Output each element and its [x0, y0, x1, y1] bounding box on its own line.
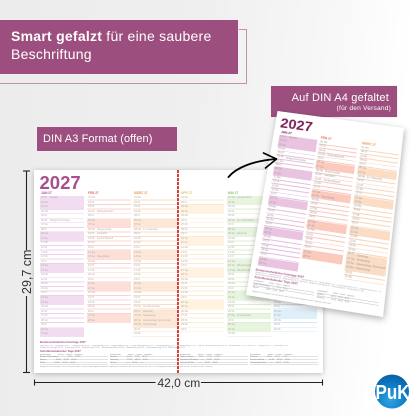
month column: March	[133, 191, 177, 336]
panel: open DIN A3 calendar: 01 Mo 02 Di 03 Mi 04 Do 05 Fr 06 Sa 07 So 08 Mo 09 Di 10 Mi 11 Do 12 Fr 13 Sa 14 So 15 Mo 16 Di 17 Mi 18 Do 19 Fr 20 Sa 21 So 22 Mo 23 Di 24 Mi 25 Do 26 Fr 27 Sa 28 So 29 Mo 30 Di 31 Mi	[134, 196, 141, 335]
panel: folded DIN A4 calendar: Weiberfastnacht	[327, 155, 344, 159]
panel: open DIN A3 calendar: FEB 27	[88, 191, 99, 195]
panel: open DIN A3 calendar: 01 Di 02 Mi 03 Do 04 Fr 05 Sa 06 So 07 Mo 08 Di 09 Mi 10 Do 11 Fr 12 Sa 13 So 14 Mo 15 Di 16 Mi 17 Do 18 Fr 19 Sa 20 So 21 Mo 22 Di 23 Mi 24 Do 25 Fr 26 Sa 27 So 28 Mo 29 Di 30 Mi	[274, 196, 281, 331]
panel: open DIN A3 calendar: 01 Mo 02 Di 03 Mi 04 Do 05 Fr 06 Sa 07 So 08 Mo 09 Di 10 Mi 11 Do 12 Fr 13 Sa 14 So 15 Mo 16 Di 17 Mi 18 Do 19 Fr 20 Sa 21 So 22 Mo 23 Di 24 Mi 25 Do 26 Fr 27 Sa 28 So	[88, 196, 95, 322]
school holidays table A4 right	[316, 290, 379, 309]
title banner	[0, 20, 238, 74]
dimension: width 42.0 cm: 42,0 cm	[158, 376, 200, 390]
panel: open DIN A3 calendar: Karfreitag	[143, 310, 153, 312]
school holidays table 1	[40, 354, 108, 365]
panel: open DIN A3 calendar: Aschermittwoch	[97, 238, 113, 240]
panel: open DIN A3 calendar: Valentinstag	[97, 256, 109, 258]
panel: folded DIN A4 calendar: Fastnacht	[324, 175, 335, 179]
title banner: Beschriftung	[11, 46, 92, 62]
panel: open DIN A3 calendar: Neujahr	[50, 197, 58, 199]
panel: folded DIN A4 calendar: FEB 27	[320, 136, 332, 141]
footnote A3: Angaben zu Feiertagen und Schulferien ohne Gewähr. Alle Angaben wurden sorgfältig recherchiert, die Daten können sich nach Drucklegung ändern, bitte prüfen Sie die Termine vor der Planung.	[40, 366, 212, 368]
panel: open DIN A3 calendar: Chr. Himmelfahrt	[237, 220, 254, 222]
panel: folded DIN A4 calendar: Rosenmontag	[325, 171, 340, 175]
school holidays table A4 left: Bundesland Winter Ostern Pfingsten Baden-Württemberg ----- 22.03. 18.05. Bayern 08.02. 22.03. 18.05.	[253, 280, 290, 293]
panel: open DIN A3 calendar: Weiberfastnacht	[97, 211, 114, 213]
month column: February	[87, 191, 131, 323]
panel: open DIN A3 calendar: 01 Sa 02 So 03 Mo 04 Di 05 Mi 06 Do 07 Fr 08 Sa 09 So 10 Mo 11 Di 12 Mi 13 Do 14 Fr 15 Sa 16 So 17 Mo 18 Di 19 Mi 20 Do 21 Fr 22 Sa 23 So 24 Mo 25 Di 26 Mi 27 Do 28 Fr 29 Sa 30 So 31 Mo	[228, 196, 235, 335]
panel: open DIN A3 calendar: JUN 27	[274, 191, 285, 195]
school holidays table 3	[180, 354, 248, 365]
school holidays table A4 left	[252, 280, 315, 298]
month column: May	[227, 191, 271, 336]
panel: folded DIN A4 calendar: Heilige Drei Könige	[286, 157, 306, 162]
holidays heading A4: Bundeseinheitliche Feiertage 2027	[255, 267, 305, 279]
footnote A4: Angaben zu Feiertagen und Schulferien ohne Gewähr. Alle Angaben wurden sorgfältig recherchiert.	[252, 290, 332, 305]
year heading A3: 2027	[40, 172, 81, 193]
panel: folded DIN A4 calendar: Valentinstag	[321, 196, 334, 200]
panel: folded DIN A4 calendar: 01 Mo 02 Di 03 Mi 04 Do 05 Fr 06 Sa 07 So 08 Mo 09 Di 10 Mi 11 Do 12 Fr 13 Sa 14 So 15 Mo 16 Di 17 Mi 18 Do 19 Fr 20 Sa 21 So 22 Mo 23 Di 24 Mi 25 Do 26 Fr 27 Sa 28 So	[303, 140, 328, 259]
panel: open DIN A3 calendar: Pfingstmontag	[237, 270, 252, 272]
year heading A4: 2027	[279, 116, 313, 135]
school holidays table A4 right: Bundesland Winter Ostern Pfingsten Bremen 01.02. 22.03. 18.05. Hamburg 29.01. 08.03. 10.05.	[317, 290, 354, 303]
label: DIN A4 folded	[271, 86, 397, 117]
label: DIN A3 format	[37, 127, 177, 151]
month column A4: January: Neujahr	[289, 137, 297, 140]
school holidays heading A3: Schulferienkalender Tage 2027	[40, 348, 81, 352]
panel: open DIN A3 calendar: MÄRZ 27	[134, 191, 148, 195]
holidays text A3: Neujahr 01.01. · Karfreitag 26.03. · Ostersonntag 28.03. · Ostermontag 29.03. · Tag der Arbeit 01.05. · Christi Himmelfahrt 06.05. · Pfingstsonntag 16.05. · Pfingstmontag 17.05. · Tag der Deutschen Einheit 03.10. · Weihnachten 25.12. und 26.12. · Neujahr 01.01. · Karfreitag 26.03. Heilige Drei Könige 06.01. · Frauentag 08.03. · Fronleichnam 27.05. · Mariä Himmelfahrt 15.08. · Weltkindertag 20.09. · Reformationstag 31.10. · Allerheiligen 01.11.	[40, 344, 288, 349]
panel: open DIN A3 calendar: Ostersonntag, Sommerzeit	[143, 320, 170, 322]
panel: open DIN A3 calendar: JAN 27	[41, 191, 52, 195]
school holidays table 2	[110, 354, 177, 365]
panel: open DIN A3 calendar: Gründonnerstag	[143, 306, 160, 308]
panel: folded DIN A4 calendar: 01 Fr 02 Sa 03 So 04 Mo 05 Di 06 Mi 07 Do 08 Fr 09 Sa 10 So 11 Mo 12 Di 13 Mi 14 Do 15 Fr 16 Sa 17 So 18 Mo 19 Di 20 Mi 21 Do 22 Fr 23 Sa 24 So 25 Mo 26 Di 27 Mi 28 Do 29 Fr 30 Sa 31 So	[259, 135, 287, 266]
panel: folded DIN A4 calendar: Karfreitag	[357, 255, 368, 258]
panel: open DIN A3 calendar: Rosenmontag	[97, 229, 111, 231]
school holidays heading A4: Schulferienkalender Tage 2027	[254, 275, 298, 286]
label: DIN A3 format: DIN A3 Format (offen)	[43, 133, 152, 145]
panel: open DIN A3 calendar: Pfingstsonntag	[237, 265, 252, 267]
panel: folded DIN A4 calendar: 01 Mo 02 Di 03 Mi 04 Do 05 Fr 06 Sa 07 So 08 Mo 09 Di 10 Mi 11 Do 12 Fr 13 Sa 14 So 15 Mo 16 Di 17 Mi 18 Do 19 Fr 20 Sa 21 So 22 Mo 23 Di 24 Mi 25 Do 26 Fr 27 Sa 28 So 29 Mo 30 Di 31 Mi	[345, 146, 369, 279]
panel: open DIN A3 calendar: Int. Frauentag	[143, 229, 157, 231]
month column: January	[40, 191, 84, 337]
title banner outline	[0, 29, 247, 84]
panel: folded DIN A4 calendar: Ostermontag	[355, 268, 370, 273]
panel: folded DIN A4 calendar: Aschermittwoch	[324, 179, 341, 184]
month column A4: January	[258, 130, 318, 272]
panel: open DIN A3 calendar: Karsamstag	[143, 315, 155, 317]
school holidays table 4	[250, 354, 318, 365]
logo: PuK: PuK	[376, 382, 410, 404]
fold line	[177, 170, 179, 373]
month column A4: March	[343, 141, 399, 286]
panel: open DIN A3 calendar: Fronleichnam	[237, 315, 251, 317]
panel: folded DIN A4 calendar: Karsamstag	[356, 259, 370, 263]
panel: folded DIN A4 calendar: Ostersonntag, Sommerzeit	[356, 264, 385, 270]
month column A4: February	[302, 136, 358, 265]
panel: folded DIN A4 calendar: Int. Frauentag	[367, 177, 382, 181]
panel: open DIN A3 calendar: Fastnacht	[97, 233, 107, 235]
dimension: height 29.7 cm: 29,7 cm	[20, 250, 34, 294]
panel: folded DIN A4 calendar: JAN 27	[281, 130, 292, 135]
logo: PuK	[375, 374, 410, 408]
holidays heading A3: Bundeseinheitliche Feiertage 2027	[40, 340, 86, 344]
panel: open DIN A3 calendar: MAI 27	[228, 191, 238, 195]
label: DIN A4 folded: (für den Versand)	[337, 104, 391, 112]
panel: folded DIN A4 calendar: MÄRZ 27	[362, 141, 376, 147]
panel: open DIN A3 calendar: Heilige Drei Könige	[50, 220, 70, 222]
panel: open DIN A3 calendar	[34, 170, 323, 373]
title banner: Smart gefalzt für eine saubere	[11, 28, 212, 44]
panel: open DIN A3 calendar: APR 27	[181, 191, 192, 195]
label: DIN A4 folded: Auf DIN A4 gefaltet	[292, 92, 389, 104]
month column: April	[180, 191, 224, 332]
panel: open DIN A3 calendar: Ostermontag	[143, 324, 156, 326]
panel: folded DIN A4 calendar	[246, 111, 404, 317]
panel: open DIN A3 calendar: Tag der Arbeit	[237, 197, 251, 199]
panel: open DIN A3 calendar: 01 Do 02 Fr 03 Sa 04 So 05 Mo 06 Di 07 Mi 08 Do 09 Fr 10 Sa 11 So 12 Mo 13 Di 14 Mi 15 Do 16 Fr 17 Sa 18 So 19 Mo 20 Di 21 Mi 22 Do 23 Fr 24 Sa 25 So 26 Mo 27 Di 28 Mi 29 Do 30 Fr	[181, 196, 188, 331]
month column: June	[273, 191, 317, 332]
panel: open DIN A3 calendar: Muttertag	[237, 233, 247, 235]
panel: open DIN A3 calendar: 01 Fr 02 Sa 03 So 04 Mo 05 Di 06 Mi 07 Do 08 Fr 09 Sa 10 So 11 Mo 12 Di 13 Mi 14 Do 15 Fr 16 Sa 17 So 18 Mo 19 Di 20 Mi 21 Do 22 Fr 23 Sa 24 So 25 Mo 26 Di 27 Mi 28 Do 29 Fr 30 Sa 31 So	[41, 196, 48, 335]
